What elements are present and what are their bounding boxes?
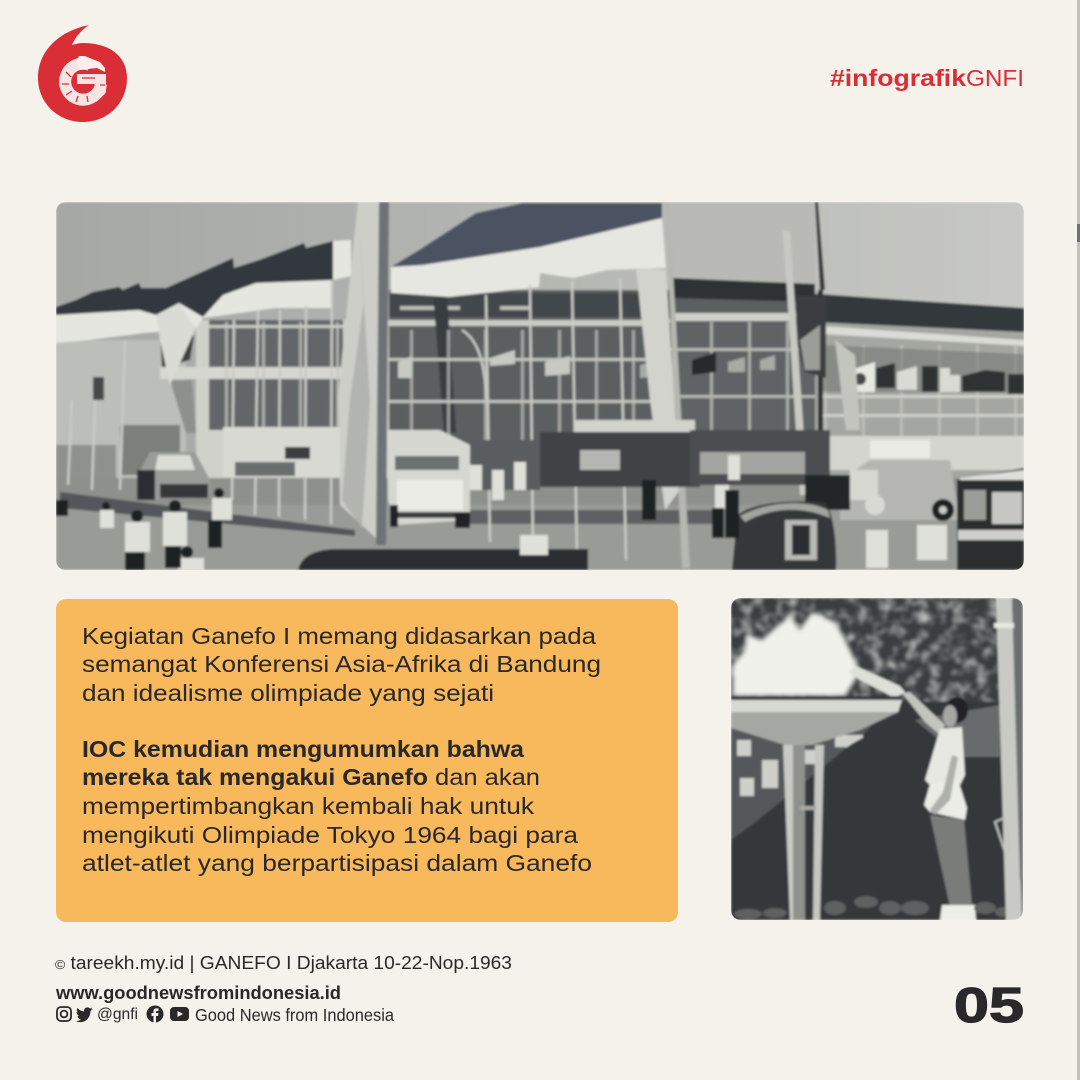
text block: second paragraph: mempertimbangkan kembali hak untuk: [82, 793, 535, 819]
icon: twitter: [76, 1007, 93, 1022]
bus right: [957, 468, 1024, 570]
car left: [137, 452, 210, 500]
pedestrians: [100, 455, 947, 572]
panel: orange text box: [56, 599, 678, 922]
cauldron: [731, 696, 902, 745]
logo: GNFI red six emblem: [38, 25, 127, 122]
tall banners and poles: [337, 202, 380, 538]
becak: [732, 501, 836, 570]
crowd left: [731, 726, 871, 840]
text block: first paragraph: Kegiatan Ganefo I memang didasarkan pada: [82, 623, 596, 649]
text block: second paragraph: [82, 736, 592, 876]
icon: facebook: [146, 1006, 164, 1022]
crowd bottom: [734, 896, 1011, 919]
photo credit: © tareekh.my.id | GANEFO I Djakarta 10-22-Nop.1963: [55, 953, 512, 973]
right edge strip: [1077, 0, 1080, 1080]
stadium left facade: [160, 290, 672, 490]
text block: second paragraph: atlet-atlet yang berpartisipasi dalam Ganefo: [82, 850, 592, 876]
website url: www.goodnewsfromindonesia.id: [55, 983, 341, 1003]
truck centre: [387, 430, 470, 528]
pedestal: [783, 745, 824, 920]
text block: second paragraph: IOC kemudian mengumumkan bahwa: [82, 736, 524, 762]
crowd top: [733, 599, 984, 604]
hashtag heading: GNFI: [966, 65, 1024, 91]
stadium centre and right facade: [640, 278, 1024, 480]
athlete: [902, 692, 976, 920]
distant trees and horizon: [56, 340, 186, 495]
icon: garuda G: [62, 56, 106, 102]
hashtag heading: #infografik: [830, 65, 967, 91]
lower road and forecourt: [56, 477, 960, 506]
row of flags: [851, 362, 875, 392]
handle: @gnfi: [97, 1006, 138, 1023]
flame: [733, 612, 860, 696]
flags right: [391, 203, 662, 267]
icon: youtube: [170, 1007, 189, 1021]
flags left: [56, 241, 333, 317]
brand name: Good News from Indonesia: [195, 1005, 394, 1025]
photo: Ganefo stadium with flags and vehicles: [56, 202, 1024, 572]
text block: first paragraph: semangat Konferensi Asia-Afrika di Bandung: [82, 651, 601, 677]
text block: second paragraph: dan akan: [435, 764, 540, 790]
right pole: [994, 598, 1023, 920]
text block: second paragraph: mereka tak mengakui Ganefo: [82, 764, 428, 790]
hashtag heading: [830, 65, 1024, 91]
social media row: [57, 1005, 394, 1025]
wall: [765, 736, 865, 815]
dark car roof foreground: [298, 549, 588, 570]
text block: second paragraph: mengikuti Olimpiade Tokyo 1964 bagi para: [82, 822, 578, 848]
icon: instagram: [57, 1007, 71, 1021]
text block: first paragraph: dan idealisme olimpiade yang sejati: [82, 680, 494, 706]
right side cars: [805, 460, 960, 521]
page number: 05: [954, 979, 1024, 1033]
text block: first paragraph: [82, 623, 601, 706]
photo: athlete lighting the Ganefo flame: [731, 598, 1023, 920]
vehicles behind: [223, 427, 340, 477]
